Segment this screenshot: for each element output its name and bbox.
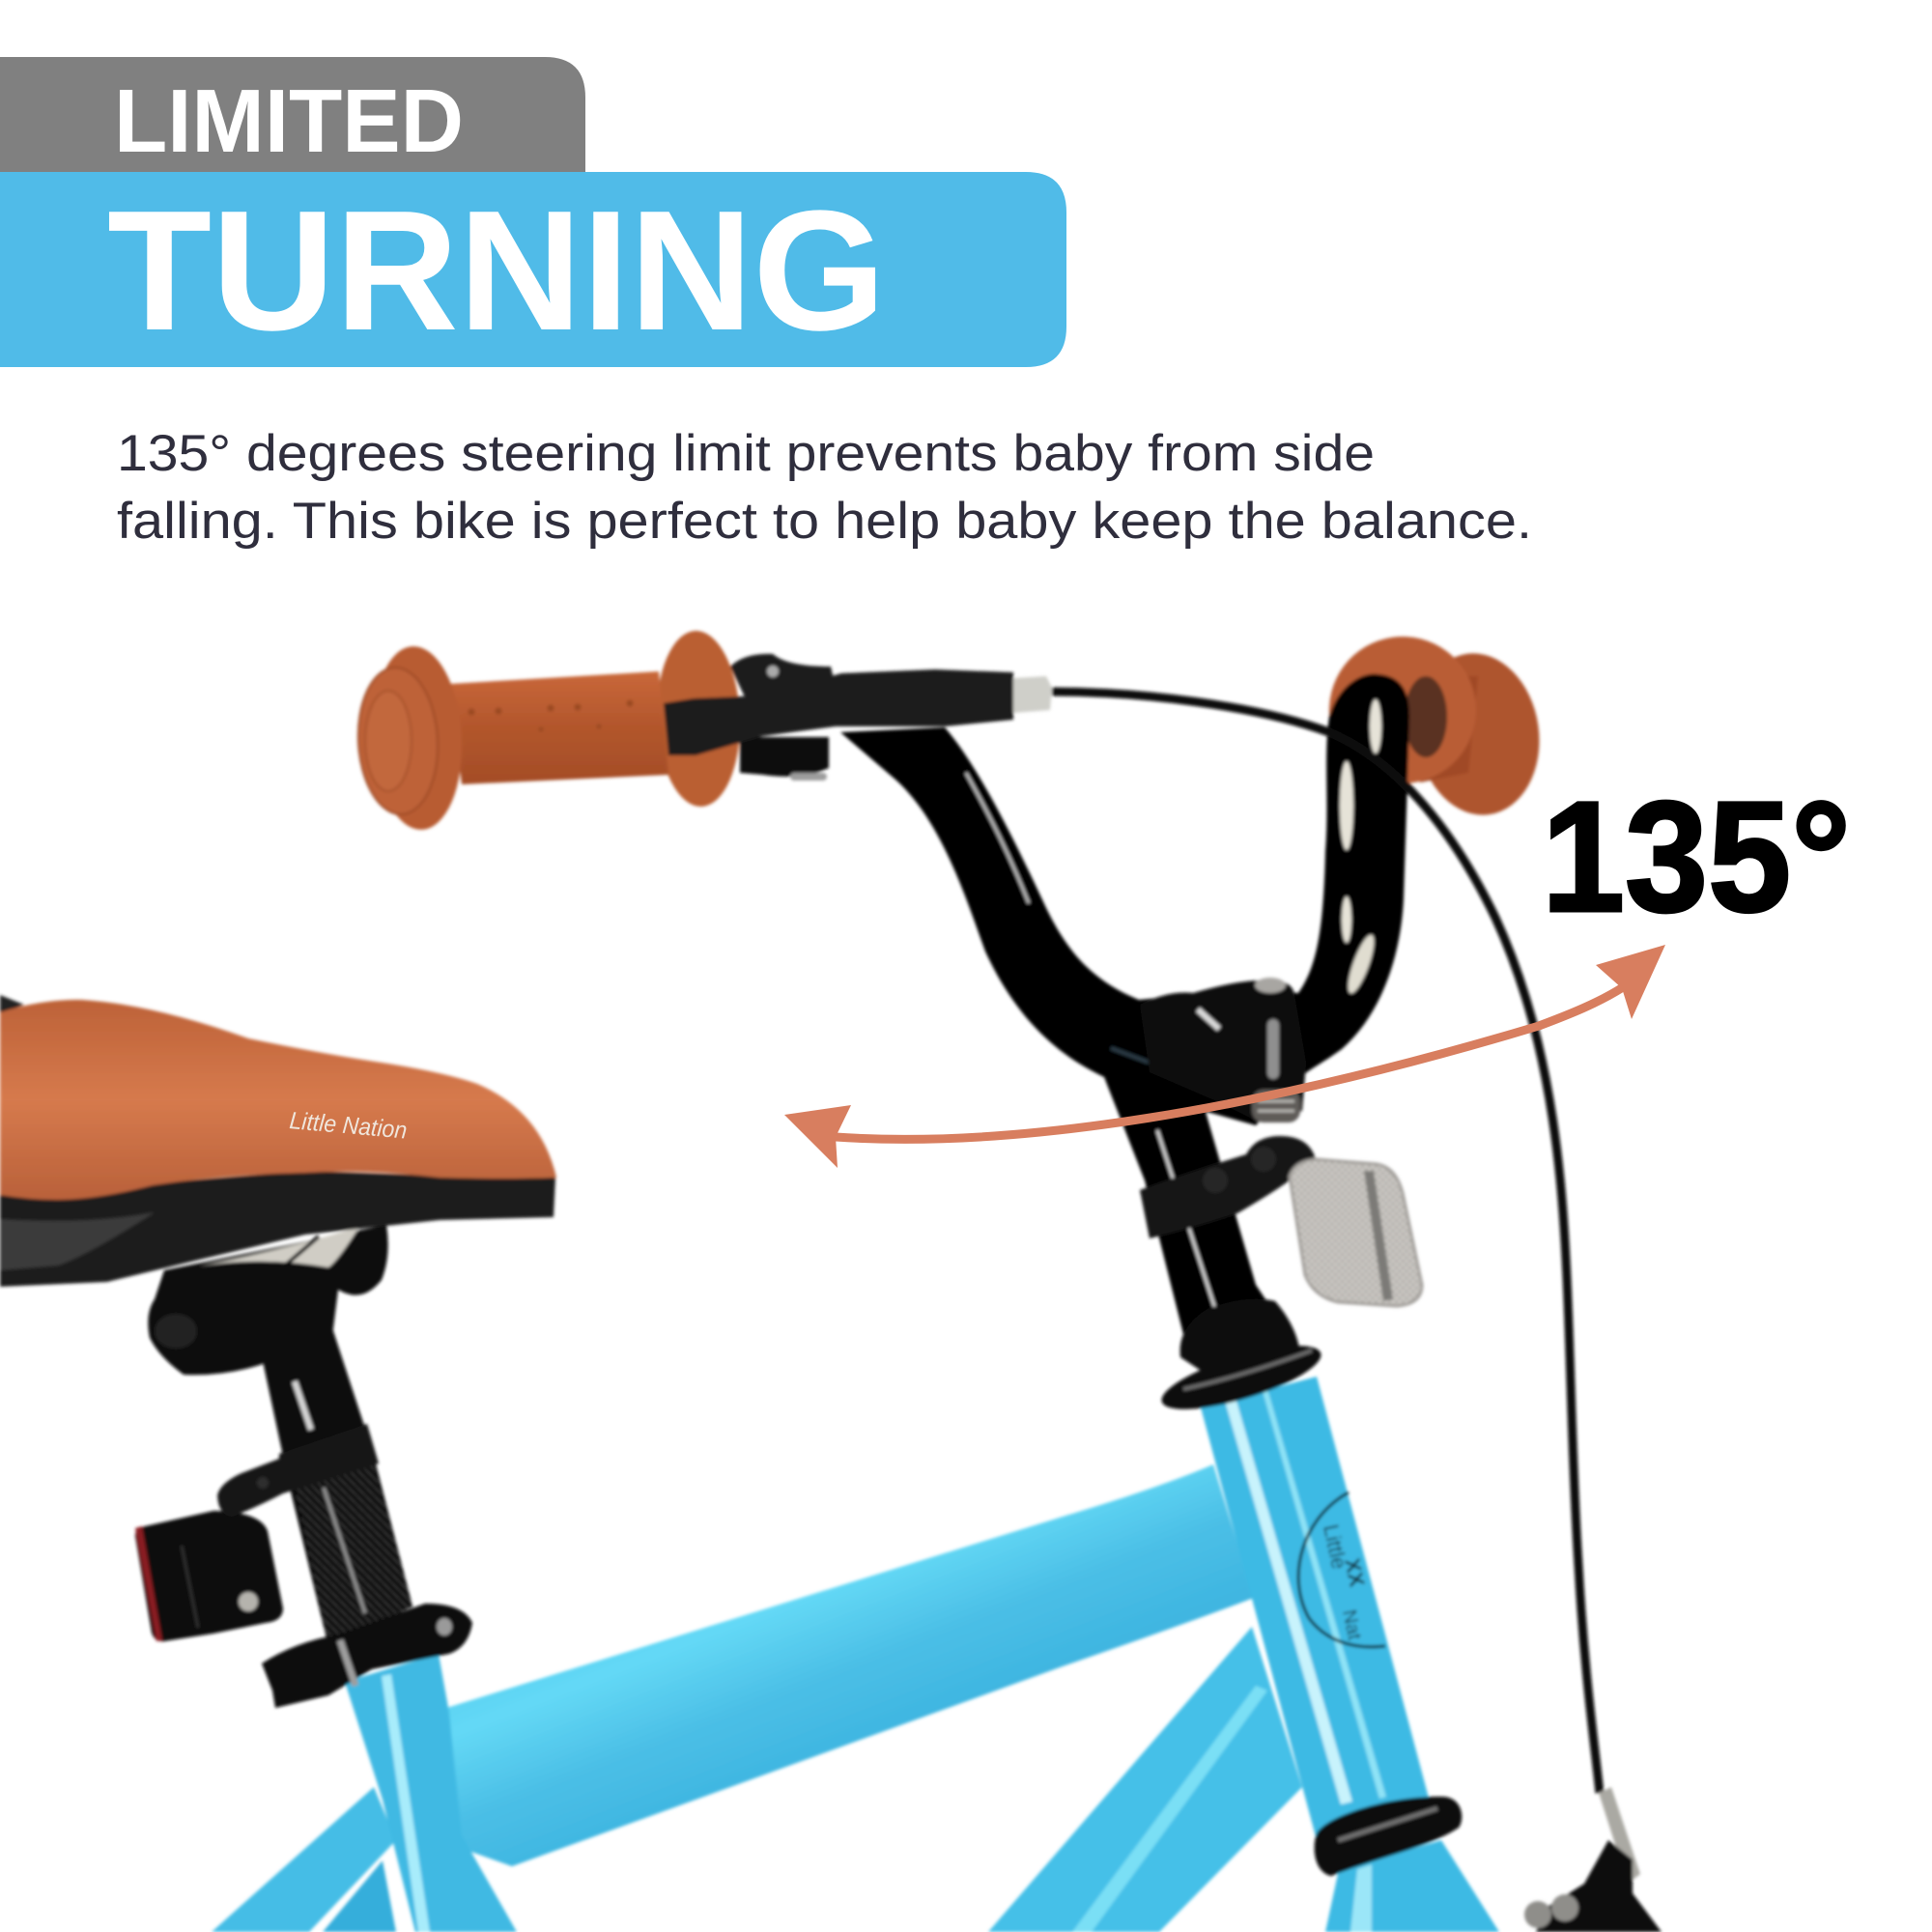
head tube logo: Nat	[1338, 1607, 1365, 1642]
heading tab: LIMITED	[0, 57, 585, 172]
saddle base	[0, 1171, 555, 1287]
heading tab: LIMITED: LIMITED	[114, 71, 464, 171]
seat mechanism	[148, 1225, 388, 1375]
front reflector bracket	[1140, 1136, 1316, 1238]
steering stem	[1104, 1077, 1275, 1338]
description text: falling. This bike is perfect to help baby keep the balance.	[117, 493, 1532, 550]
head tube logo	[1298, 1492, 1385, 1647]
brake lever	[664, 654, 1013, 781]
front reflector	[1290, 1159, 1422, 1306]
handlebar clamp and bolts	[1140, 978, 1306, 1122]
right grip	[1320, 627, 1549, 823]
angle label 135 degrees: 135°	[1542, 768, 1851, 945]
heading banner: TURNING: TURNING	[107, 175, 886, 366]
lower head tube ring	[1315, 1797, 1462, 1876]
head tube logo: XX	[1340, 1556, 1370, 1589]
upper headset rings	[1155, 1299, 1327, 1422]
rear reflector	[135, 1511, 283, 1641]
left grip	[355, 630, 743, 832]
seat clamp	[262, 1604, 472, 1708]
rear reflector bracket	[217, 1424, 379, 1517]
bike frame	[212, 1377, 1499, 1932]
brake cable ferrule	[1013, 676, 1052, 713]
saddle rear sliver	[0, 995, 24, 1014]
brake mechanism	[1524, 1840, 1662, 1932]
seat post	[260, 1319, 412, 1646]
bicycle photo illustration	[0, 627, 1662, 1932]
saddle top	[0, 1000, 556, 1200]
head tube logo: Little	[1319, 1522, 1351, 1572]
saddle brand text: Little Nation	[288, 1107, 408, 1145]
handlebar	[840, 674, 1409, 1125]
brake cable	[1052, 692, 1640, 1884]
steering arc arrow	[784, 945, 1665, 1168]
description text	[117, 425, 1532, 550]
description text: 135° degrees steering limit prevents baby from side	[117, 425, 1375, 482]
